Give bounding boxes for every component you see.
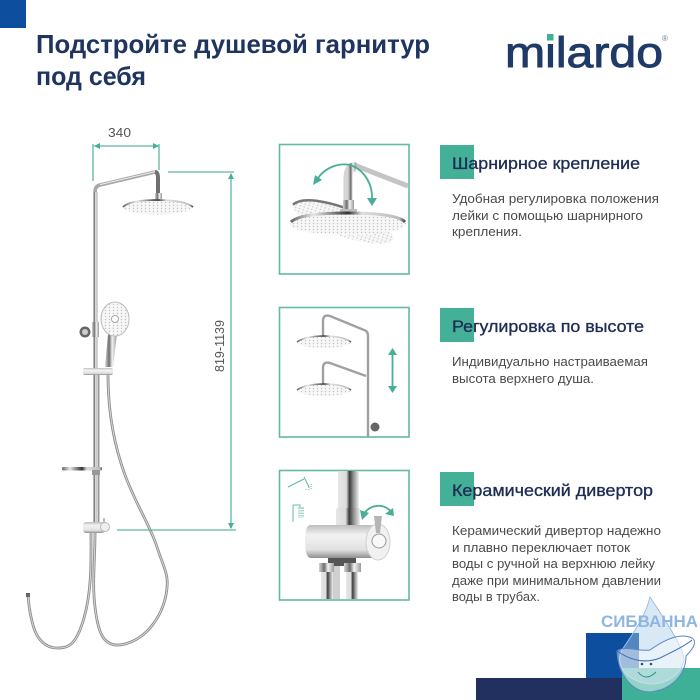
- lower valves: [321, 564, 333, 599]
- title: [36, 29, 430, 91]
- feature 1: hinge mount: [440, 145, 659, 239]
- wall bracket: [80, 326, 90, 338]
- bottom colour blocks: [476, 633, 700, 700]
- shower icons: [288, 477, 311, 522]
- feature 3: ceramic diverter: и плавно переключает поток: [452, 540, 630, 555]
- feature 3: ceramic diverter: Керамический дивертор надежно: [452, 523, 661, 538]
- lower head: [297, 384, 351, 396]
- knob: [370, 422, 380, 432]
- slider bar: [83, 368, 113, 375]
- front shower head: [290, 213, 406, 235]
- decorative corner square: [0, 0, 26, 28]
- feature 3: ceramic diverter: даже при минимальном давлении: [452, 573, 661, 588]
- hand shower: [105, 334, 117, 367]
- title: под себя: [36, 61, 146, 91]
- upper arm: [95, 172, 155, 192]
- dimension: 340: 340: [108, 125, 131, 140]
- feature 3: ceramic diverter: [440, 472, 661, 604]
- feature 2: height adjustment: Индивидуально настраиваемая: [452, 354, 648, 369]
- watermark: Сибванна: СИБВАННА: [601, 612, 698, 631]
- lever: [374, 516, 382, 533]
- up-down arrow: [392, 352, 394, 390]
- feature 2: height adjustment: [440, 308, 648, 386]
- vertical rail: [93, 192, 98, 524]
- lever arrow: [363, 506, 392, 516]
- tilted shower head: [288, 192, 398, 252]
- pipe: [338, 471, 359, 509]
- diverter body: [305, 525, 378, 558]
- arm: [354, 165, 408, 186]
- feature 1: hinge mount: Шарнирное крепление: [452, 154, 640, 173]
- panel: hinge mount image: [280, 144, 409, 274]
- dimension: 819-1139: [117, 172, 236, 530]
- feature 2: height adjustment: Регулировка по высоте: [452, 317, 644, 336]
- feature 1: hinge mount: крепления.: [452, 224, 522, 239]
- rail: [323, 316, 368, 437]
- feature 3: ceramic diverter: воды с ручной на верхнюю лейку: [452, 556, 656, 571]
- logo: milardo: ®: [662, 34, 668, 43]
- panel: ceramic diverter image: [280, 470, 409, 600]
- title: Подстройте душевой гарнитур: [36, 29, 430, 59]
- rotation arrow: [316, 164, 372, 200]
- diverter: [83, 522, 105, 533]
- gooseneck: [348, 167, 356, 202]
- dimension: 819-1139: 819-1139: [212, 320, 227, 372]
- panel: height adjustment image: [280, 308, 409, 437]
- feature 1: hinge mount: Удобная регулировка положения: [452, 191, 659, 206]
- logo: milardo: milardo: [505, 29, 663, 77]
- shower system drawing: [26, 172, 193, 648]
- watermark: Сибванна: [601, 597, 698, 692]
- overhead shower head: [122, 200, 192, 214]
- hoses: [26, 375, 167, 648]
- upper head: [297, 336, 351, 348]
- feature 1: hinge mount: лейки с помощью шарнирного: [452, 208, 643, 223]
- second rail: [98, 375, 100, 523]
- soap dish: [62, 467, 102, 470]
- dimension: 340: [93, 125, 159, 181]
- feature 2: height adjustment: высота верхнего душа.: [452, 371, 594, 386]
- feature 3: ceramic diverter: Керамический дивертор: [452, 481, 653, 500]
- feature 3: ceramic diverter: воды в трубах.: [452, 589, 540, 604]
